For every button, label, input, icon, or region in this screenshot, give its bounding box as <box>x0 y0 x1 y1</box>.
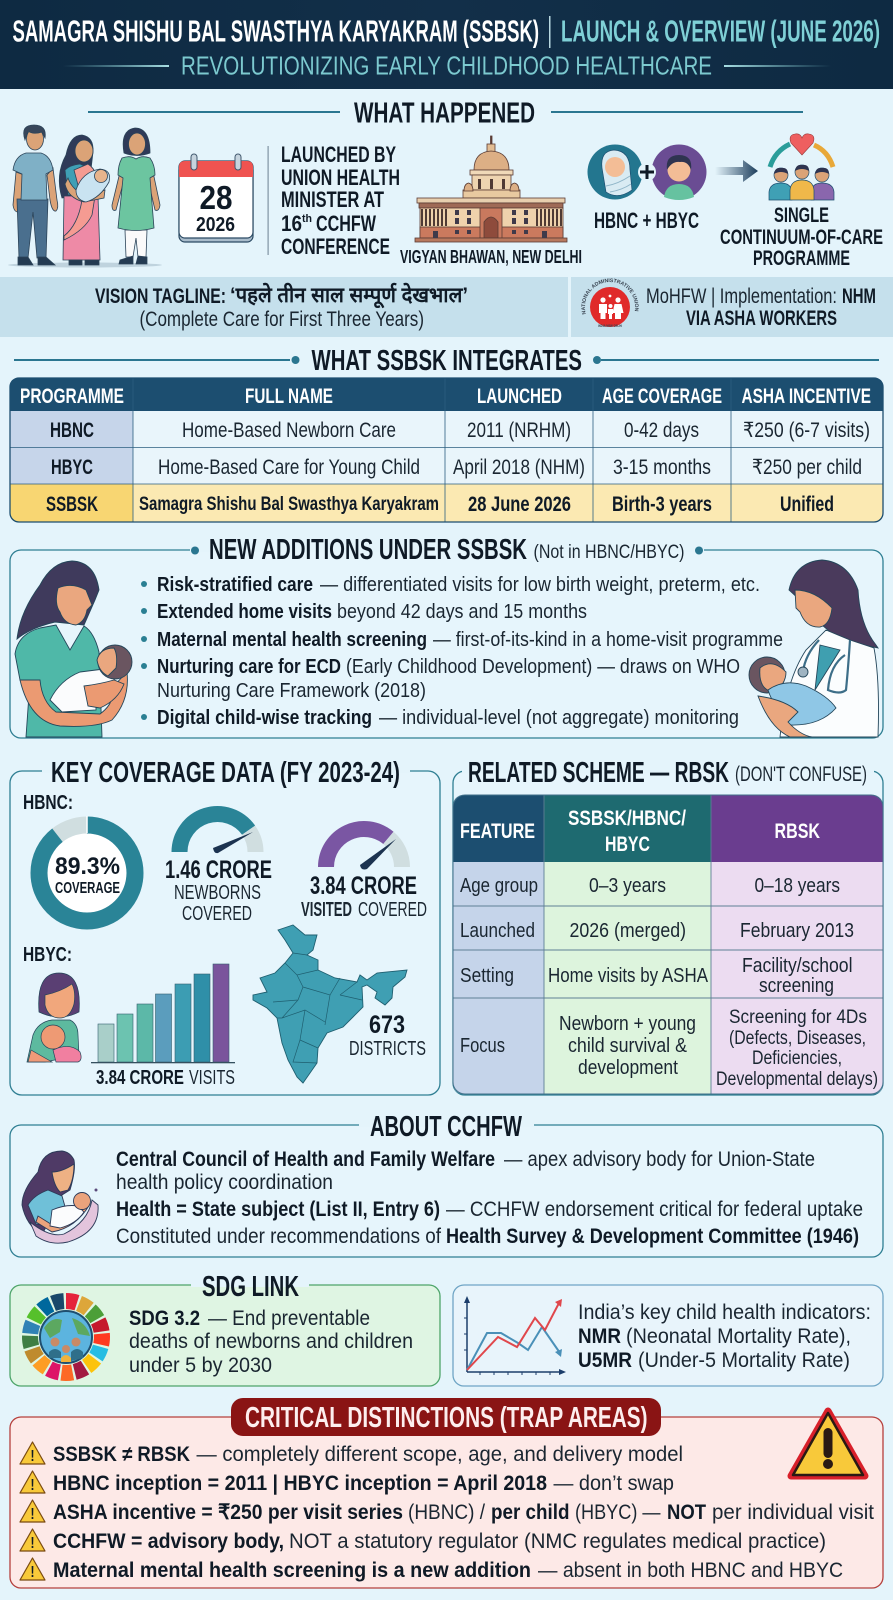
item: ASHA incentive: NOT <box>667 1501 706 1524</box>
text block: CCHFW details: Health = State subject (List II, Entry 6) <box>116 1198 440 1221</box>
text block: launched by: CCHFW <box>316 211 376 236</box>
vision tagline band: VISION TAGLINE: <box>95 285 226 308</box>
icon: calendar date 28 2026 <box>179 154 253 242</box>
chart: visits gauge: 3.84 CRORE <box>310 872 417 900</box>
heading: what happened: WHAT HAPPENED <box>354 98 535 130</box>
table: SSBSK versus RBSK: SSBSK/HBNC/ <box>568 807 686 830</box>
row: launched: Launched <box>460 920 535 942</box>
heading: new additions: NEW ADDITIONS UNDER SSBSK <box>209 534 527 566</box>
ministry band: NHM <box>842 285 876 308</box>
row: setting: screening <box>759 975 834 997</box>
item: ASHA incentive: (HBNC) / <box>408 1501 485 1524</box>
row: focus: Deficiencies, <box>752 1048 842 1069</box>
vision tagline band: ‘पहले तीन साल सम्पूर्ण देखभाल’ <box>230 282 468 309</box>
item: CCHFW advisory: CCHFW = advisory body, <box>53 1530 284 1553</box>
bullet list: Maternal mental health screening <box>157 629 427 651</box>
text block: SDG 3.2: deaths of newborns and children <box>129 1330 413 1353</box>
row: HBNC: ₹250 (6-7 visits) <box>743 419 870 442</box>
panel: key coverage data <box>10 757 440 1095</box>
row: HBYC: April 2018 (NHM) <box>453 456 585 479</box>
icon: HBNC plus HBYC <box>588 144 706 233</box>
table header <box>10 378 883 411</box>
row: focus: development <box>578 1057 678 1079</box>
row: SSBSK: Samagra Shishu Bal Swasthya Karyakram <box>139 494 439 515</box>
table: SSBSK versus RBSK <box>453 795 883 1094</box>
label: HBNC + HBYC: HBNC + HBYC <box>594 208 699 233</box>
chart: HBYC bar chart <box>91 964 235 1089</box>
chart: HBNC coverage donut <box>39 816 135 921</box>
man <box>13 125 58 265</box>
text block: CCHFW details: health policy coordination <box>116 1171 333 1194</box>
icon: ministry logo: INDIA NEW DELHI <box>598 324 622 328</box>
illustration: doctor with baby <box>749 560 878 737</box>
heading: what SSBSK integrates: WHAT SSBSK INTEGRATES <box>312 345 582 377</box>
chart: indicator trend lines <box>464 1296 566 1375</box>
chart: visits gauge: VISITED <box>301 899 352 921</box>
panel: related scheme RBSK <box>453 757 883 1095</box>
heading: SDG link: SDG LINK <box>202 1271 299 1303</box>
panel: SDG link <box>10 1271 440 1388</box>
item: ASHA incentive: ! <box>30 1506 34 1523</box>
illustration: mother with baby <box>15 561 132 737</box>
row: SSBSK: Birth-3 years <box>612 493 712 516</box>
table: SSBSK versus RBSK: HBYC <box>605 833 650 856</box>
item: CCHFW advisory: ! <box>30 1535 34 1552</box>
chart: newborns gauge <box>165 814 272 925</box>
text block: indicators: (Neonatal Mortality Rate), <box>626 1325 851 1348</box>
item: ASHA incentive <box>20 1500 874 1524</box>
item: SSBSK not RBSK: — completely different scope, age, and delivery model <box>196 1443 683 1466</box>
row: SSBSK: Unified <box>780 493 834 516</box>
chart: HBYC bar chart: 3.84 CRORE <box>96 1066 184 1089</box>
bullet list: — individual-level (not aggregate) monitoring <box>379 707 739 729</box>
heading: new additions: (Not in HBNC/HBYC) <box>534 542 684 563</box>
illustration: HBYC mother <box>27 973 81 1062</box>
arrow <box>715 160 758 182</box>
item: ASHA incentive: (HBYC) — <box>575 1501 660 1524</box>
row: setting: Setting <box>460 965 514 987</box>
item: ASHA incentive: per individual visit <box>712 1501 874 1524</box>
row: age group: 0–18 years <box>754 875 840 897</box>
text block: indicators <box>578 1301 871 1372</box>
table header: LAUNCHED <box>477 385 562 408</box>
chart: newborns gauge: 1.46 CRORE <box>165 856 272 884</box>
row: HBYC: Home-Based Care for Young Child <box>158 456 420 479</box>
vision tagline band <box>0 277 568 337</box>
item: inception dates: HBNC inception = 2011 | HBYC inception = April 2018 <box>53 1472 547 1495</box>
text block: SDG 3.2: SDG 3.2 <box>129 1307 200 1330</box>
icon: SDG wheel <box>15 1286 117 1388</box>
text block: launched by: LAUNCHED BY <box>281 142 396 167</box>
text block: launched by: 16 <box>281 211 302 236</box>
heading: critical distinctions: CRITICAL DISTINCTIONS (TRAP AREAS) <box>245 1402 648 1434</box>
illustration: family <box>8 125 162 268</box>
chart: HBYC bar chart: VISITS <box>189 1066 235 1089</box>
text block: launched by: UNION HEALTH <box>281 165 400 190</box>
item: SSBSK not RBSK: ! <box>30 1448 34 1465</box>
panel: child health indicators <box>453 1285 883 1386</box>
text block: indicators: India’s key child health indicators: <box>578 1301 871 1324</box>
row: HBNC: 2011 (NRHM) <box>467 419 571 442</box>
row: setting: Home visits by ASHA <box>548 965 709 987</box>
item: inception dates: ! <box>30 1477 34 1494</box>
panel: new additions <box>10 534 883 738</box>
table header: FULL NAME <box>245 385 333 408</box>
vision tagline band: (Complete Care for First Three Years) <box>140 308 424 331</box>
map: India districts <box>253 925 426 1083</box>
subtitle: REVOLUTIONIZING EARLY CHILDHOOD HEALTHCARE <box>181 50 712 80</box>
text block: launched by: MINISTER AT <box>281 187 384 212</box>
row: focus: child survival & <box>568 1035 688 1057</box>
heading: about CCHFW: ABOUT CCHFW <box>370 1111 522 1143</box>
item: inception dates: — don’t swap <box>554 1472 674 1495</box>
chart: visits gauge: COVERED <box>358 899 427 921</box>
label: single programme: SINGLE <box>774 204 829 227</box>
header banner <box>0 0 893 89</box>
text block: SDG 3.2: — End preventable <box>208 1307 370 1330</box>
item: maternal mental health: ! <box>30 1564 34 1581</box>
label: Vigyan Bhawan: VIGYAN BHAWAN, NEW DELHI <box>400 247 582 267</box>
ministry band: MoHFW | Implementation: <box>646 285 837 308</box>
row: SSBSK: SSBSK <box>46 493 98 516</box>
bullet list: (Early Childhood Development) — draws on WHO <box>346 656 740 678</box>
row: launched: February 2013 <box>740 920 854 942</box>
row: focus: Focus <box>460 1035 505 1057</box>
item: ASHA incentive: per child <box>491 1501 570 1524</box>
row: HBYC: 3-15 months <box>613 456 711 479</box>
row: HBNC: 0-42 days <box>624 419 699 442</box>
title: SAMAGRA SHISHU BAL SWASTHYA KARYAKRAM (SSBSK) <box>12 14 539 48</box>
item: ASHA incentive: ASHA incentive = ₹250 per visit series <box>53 1501 403 1524</box>
bullet list <box>141 574 783 729</box>
item: CCHFW advisory <box>20 1529 826 1553</box>
item: CCHFW advisory: NOT a statutory regulator (NMC regulates medical practice) <box>289 1530 826 1553</box>
table header: AGE COVERAGE <box>602 385 722 408</box>
heading: key coverage data: KEY COVERAGE DATA (FY 2023-24) <box>51 757 400 789</box>
row: setting: Facility/school <box>742 955 852 977</box>
text block: CCHFW details <box>116 1148 863 1248</box>
illustration: Vigyan Bhawan building <box>400 136 582 267</box>
text block: CCHFW details: Central Council of Health and Family Welfare <box>116 1148 495 1171</box>
row: focus: (Defects, Diseases, <box>729 1028 866 1049</box>
icon: calendar date 28 2026: 28 <box>200 179 232 216</box>
row: HBYC <box>51 456 862 479</box>
item: maternal mental health: Maternal mental health screening is a new addition <box>53 1559 531 1582</box>
row: HBYC: HBYC <box>51 456 93 479</box>
row: focus: Newborn + young <box>559 1013 696 1035</box>
bullet list: Nurturing care for ECD <box>157 656 341 678</box>
text block: CCHFW details: — apex advisory body for Union-State <box>504 1148 815 1171</box>
row: focus: Screening for 4Ds <box>729 1007 867 1028</box>
ministry band <box>571 277 893 337</box>
item: SSBSK not RBSK: SSBSK ≠ RBSK <box>53 1443 190 1466</box>
item: maternal mental health <box>20 1558 843 1582</box>
text block: launched by: th <box>302 213 312 225</box>
row: SSBSK <box>10 484 883 522</box>
row: launched <box>460 920 854 942</box>
label: single programme <box>720 204 883 270</box>
bullet list: Digital child-wise tracking <box>157 707 372 729</box>
icon: calendar date 28 2026: 2026 <box>196 213 235 236</box>
chart: visits gauge <box>301 829 427 921</box>
label: HBYC: HBYC: <box>23 944 72 966</box>
item: maternal mental health: — absent in both HBNC and HBYC <box>538 1559 843 1582</box>
text block: SDG 3.2: under 5 by 2030 <box>129 1354 272 1377</box>
bullet list: beyond 42 days and 15 months <box>337 601 587 623</box>
row: HBNC <box>50 419 870 442</box>
text block: indicators: U5MR <box>578 1349 632 1372</box>
panel: about CCHFW <box>10 1111 883 1257</box>
heading: related scheme: RELATED SCHEME — RBSK <box>468 757 729 789</box>
icon: mother nursing <box>22 1151 98 1243</box>
table: programme comparison <box>10 378 883 522</box>
icon: single programme <box>720 134 883 270</box>
panel: critical distinctions <box>10 1398 883 1588</box>
chart: newborns gauge: COVERED <box>182 903 252 925</box>
text block: indicators: NMR <box>578 1325 621 1348</box>
text block: launched by: CONFERENCE <box>281 234 390 259</box>
bullet list: Risk-stratified care <box>157 574 313 596</box>
chart: HBNC coverage donut: COVERAGE <box>55 880 120 897</box>
text block: CCHFW details: Constituted under recommendations of <box>116 1225 441 1248</box>
map: India districts: 673 <box>369 1011 405 1039</box>
row: SSBSK: 28 June 2026 <box>468 493 571 516</box>
woman in green <box>112 128 160 264</box>
bullet list: Nurturing Care Framework (2018) <box>157 680 426 702</box>
label: single programme: PROGRAMME <box>753 247 850 270</box>
row: setting <box>460 955 852 997</box>
text block: indicators: (Under-5 Mortality Rate) <box>638 1349 850 1372</box>
chart: HBNC coverage donut: 89.3% <box>55 853 120 880</box>
row: focus <box>460 1007 878 1090</box>
chart: newborns gauge: NEWBORNS <box>174 882 261 904</box>
label: HBNC: HBNC: <box>23 792 73 814</box>
bullet list: — differentiated visits for low birth weight, preterm, etc. <box>320 574 760 596</box>
text block: SDG 3.2 <box>129 1307 413 1377</box>
text block: launched by <box>281 142 400 259</box>
row: age group <box>460 875 840 897</box>
item: SSBSK not RBSK <box>20 1442 683 1466</box>
icon: large warning triangle <box>791 1411 865 1476</box>
row: HBNC: HBNC <box>50 419 94 442</box>
bullet list: Extended home visits <box>157 601 332 623</box>
row: age group: Age group <box>460 875 538 897</box>
woman in sari with baby <box>59 135 110 265</box>
heading: critical distinctions <box>231 1398 661 1436</box>
table: SSBSK versus RBSK: FEATURE <box>460 820 535 843</box>
map: India districts: DISTRICTS <box>349 1038 426 1060</box>
row: launched: 2026 (merged) <box>570 920 686 942</box>
row: HBNC: Home-Based Newborn Care <box>182 419 396 442</box>
table header: PROGRAMME <box>20 385 124 408</box>
bullet list: — first-of-its-kind in a home-visit programme <box>433 629 783 651</box>
row: HBYC: ₹250 per child <box>752 456 862 479</box>
icon: ministry logo: NATIONAL ADMINISTRATIVE UNION <box>581 278 639 314</box>
table: SSBSK versus RBSK: RBSK <box>774 820 820 843</box>
row: age group: 0–3 years <box>589 875 666 897</box>
heading: what SSBSK integrates <box>14 345 879 377</box>
